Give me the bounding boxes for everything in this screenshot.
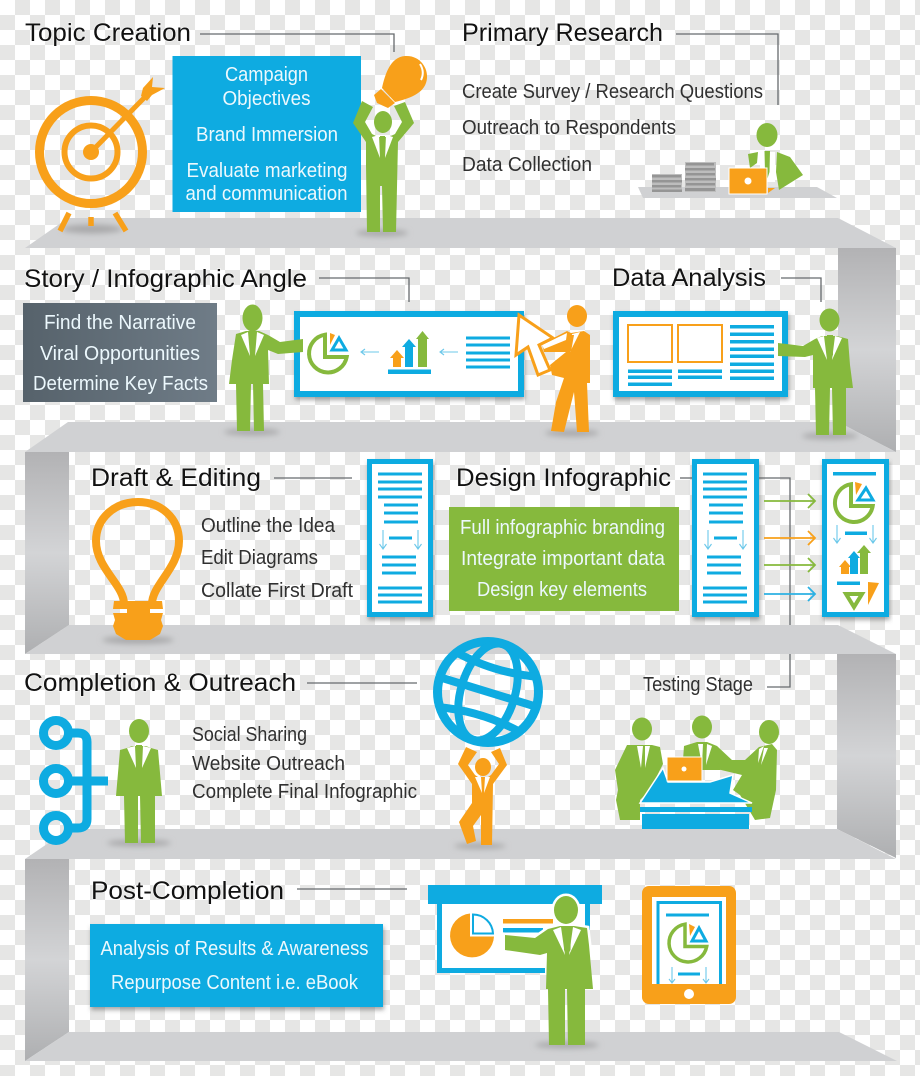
text block: outreach steps: Social Sharing bbox=[192, 724, 307, 746]
board: source document bbox=[694, 462, 756, 614]
text block: research steps: Outreach to Respondents bbox=[462, 117, 676, 139]
figure: researcher at desk bbox=[638, 123, 837, 198]
callout: narrative box: Find the Narrative bbox=[44, 312, 196, 334]
left wall 2 bbox=[25, 452, 69, 654]
left wall 4 bbox=[25, 859, 69, 1061]
heading: topic creation: Topic Creation bbox=[25, 19, 191, 47]
board: finished infographic bbox=[824, 462, 886, 614]
icon: globe bbox=[426, 630, 550, 754]
heading: primary research: Primary Research bbox=[462, 19, 663, 47]
text block: research steps: Create Survey / Research Questions bbox=[462, 81, 763, 103]
heading: post-completion: Post-Completion bbox=[91, 877, 284, 905]
icon: light bulb outline bbox=[96, 502, 179, 644]
right wall 1 bbox=[838, 248, 896, 452]
callout: campaign objectives: and communication bbox=[186, 183, 348, 205]
icon: target with arrow bbox=[40, 77, 165, 234]
icon: sharing hub bbox=[44, 720, 108, 840]
text block: draft steps: Collate First Draft bbox=[201, 580, 353, 602]
figure: man holding globe bbox=[454, 747, 507, 849]
callout: design steps: Design key elements bbox=[477, 579, 647, 601]
icon: rising bars bbox=[839, 545, 871, 574]
icon: rising bars bbox=[388, 331, 431, 374]
board: draft document bbox=[370, 462, 430, 614]
shelf 4 bbox=[25, 829, 896, 859]
callout: analysis box: Repurpose Content i.e. eBook bbox=[111, 972, 359, 994]
panel: design infographic bbox=[449, 462, 886, 614]
callout: narrative box bbox=[23, 303, 217, 402]
panel: testing stage bbox=[615, 674, 779, 829]
connector lines bbox=[200, 34, 821, 889]
right wall 3 bbox=[837, 654, 896, 858]
arrows: transforming to design bbox=[764, 494, 815, 601]
icon: pie chart bbox=[309, 333, 347, 372]
shelf 1 bbox=[25, 218, 896, 248]
text block: outreach steps: Website Outreach bbox=[192, 753, 345, 775]
heading: story angle: Story / Infographic Angle bbox=[24, 265, 307, 293]
shelf 5 bbox=[25, 1032, 897, 1061]
callout: campaign objectives: Evaluate marketing bbox=[186, 160, 348, 182]
panel: primary research bbox=[462, 19, 837, 198]
figure: analyst pointing bbox=[778, 308, 858, 440]
panel: post-completion bbox=[90, 877, 736, 1048]
panel: draft and editing bbox=[91, 462, 430, 644]
callout: narrative box: Determine Key Facts bbox=[33, 373, 208, 395]
building shelves and walls bbox=[25, 218, 897, 1061]
heading: draft and editing: Draft & Editing bbox=[91, 464, 261, 492]
callout: design steps: Full infographic branding bbox=[460, 517, 665, 539]
text block: research steps: Data Collection bbox=[462, 154, 592, 176]
board: chart storyboard bbox=[297, 314, 521, 394]
figure: presenter bbox=[224, 304, 303, 436]
figure: team around table bbox=[615, 716, 779, 829]
callout: design steps: Integrate important data bbox=[461, 548, 666, 570]
heading: design infographic: Design Infographic bbox=[456, 464, 671, 492]
panel: completion and outreach bbox=[24, 630, 550, 849]
text lines bbox=[466, 336, 510, 368]
heading: data analysis: Data Analysis bbox=[612, 264, 766, 292]
text block: outreach steps: Complete Final Infographic bbox=[192, 781, 417, 803]
callout: analysis box bbox=[90, 924, 383, 1007]
icon: pie chart bbox=[835, 482, 873, 522]
shelf 2 bbox=[25, 422, 896, 452]
panel: story / infographic angle bbox=[23, 265, 599, 436]
heading: completion and outreach: Completion & Outreach bbox=[24, 669, 296, 697]
callout: campaign objectives: Brand Immersion bbox=[196, 124, 338, 146]
callout: campaign objectives bbox=[172, 56, 361, 212]
text block: research steps bbox=[462, 81, 763, 176]
figure: man holding light bulb bbox=[353, 56, 427, 236]
callout: campaign objectives: Campaign bbox=[225, 64, 308, 86]
shelf 3 bbox=[25, 625, 896, 654]
icon: tablet bbox=[642, 886, 736, 1004]
callout: design steps bbox=[449, 507, 679, 611]
text block: draft steps bbox=[201, 515, 353, 602]
figure: projector presentation bbox=[428, 885, 602, 1048]
figure: man with cursor bbox=[516, 305, 599, 436]
panel: topic creation bbox=[25, 19, 427, 236]
text block: outreach steps bbox=[192, 724, 417, 803]
text block: draft steps: Outline the Idea bbox=[201, 515, 336, 537]
callout: narrative box: Viral Opportunities bbox=[40, 343, 200, 365]
heading: testing stage: Testing Stage bbox=[643, 674, 753, 696]
callout: analysis box: Analysis of Results & Awareness bbox=[100, 938, 368, 960]
arrows: pointing left bbox=[361, 349, 458, 355]
icon: pie chart bbox=[669, 924, 707, 962]
callout: campaign objectives: Objectives bbox=[222, 88, 310, 110]
text block: draft steps: Edit Diagrams bbox=[201, 547, 318, 569]
board: data dashboard bbox=[616, 314, 785, 394]
panel: data analysis bbox=[612, 264, 858, 440]
figure: man at hub bbox=[107, 719, 171, 846]
